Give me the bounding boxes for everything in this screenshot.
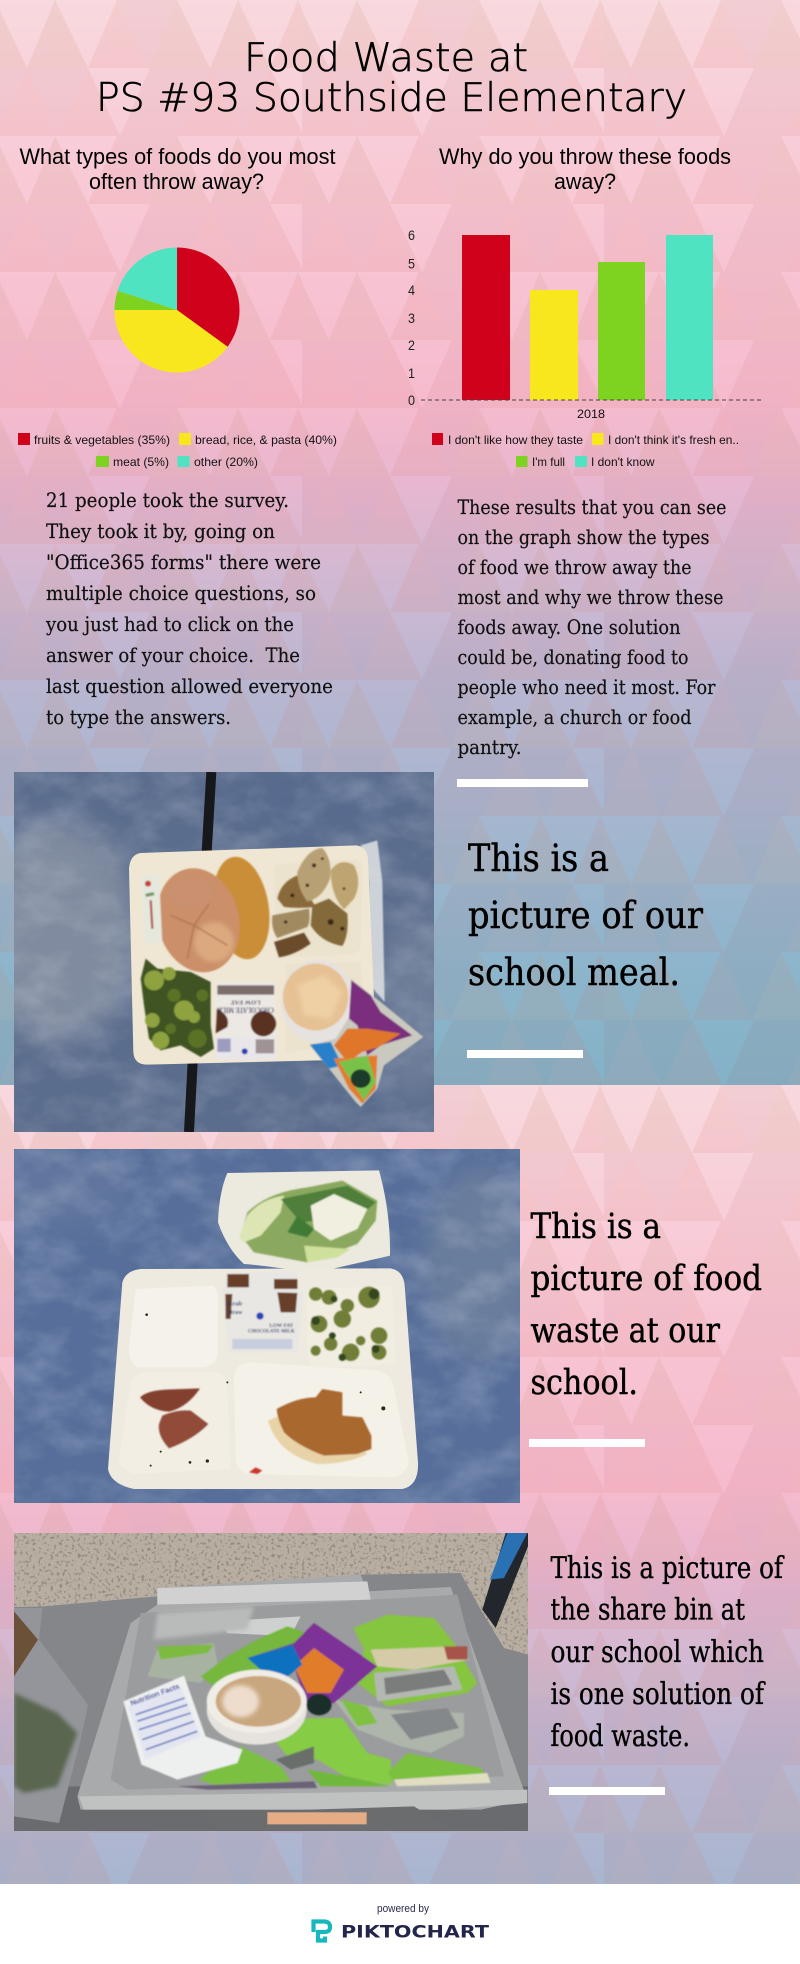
caption: share bin [550,1551,785,1754]
footer: powered by Piktochart [0,1884,800,1964]
bin label [267,1812,367,1824]
bar: not fresh [530,290,578,400]
title: Food Waste at [244,36,528,81]
potato wedges [272,848,358,957]
pie chart [114,247,240,373]
plastic utensil wrap [361,840,385,1002]
bar chart legend: I don't think it's fresh en.. [608,433,739,447]
paper food boat [218,1170,390,1273]
text block: results and solution [458,495,726,759]
text block: survey method: "Office365 forms" there were [46,550,321,574]
pie chart legend [18,433,337,469]
logo wordmark: PIKTOCHART [341,1922,489,1942]
black pipe in the photo [189,772,211,1132]
y axis labels: 4 [408,282,415,298]
caption: food waste: picture of food [530,1259,762,1299]
background: triangle pattern with gradient, lower block [0,1085,800,1884]
pie chart legend: meat (5%) [113,455,169,469]
caption: school meal [468,837,703,994]
y axis labels: 0 [408,392,415,408]
heading: pie chart question [20,144,336,194]
text block: survey method: last question allowed everyone [46,674,333,698]
broccoli [141,959,214,1057]
text block: results and solution: of food we throw away the [458,555,692,579]
milk carton [216,982,276,1059]
bar chart legend [432,433,739,469]
milk carton: Grab [227,1301,243,1308]
x axis label: 2018 [577,407,605,421]
pie chart legend: other (20%) [194,455,258,469]
green produce bags [147,1615,491,1790]
milk carton with nutrition label: Nutrition Facts [130,1683,181,1708]
background: triangle pattern with gradient, upper block [0,0,800,1085]
crumbs [145,1313,385,1467]
text block: results and solution: most and why we throw these [458,585,724,609]
granite counter [14,1533,528,1655]
text block: results and solution: example, a church or food [458,705,692,729]
divider bar 1 [457,779,588,787]
milk carton: LOW FAT [231,998,261,1004]
peach cup [281,960,355,1043]
sauce cup [207,1670,307,1745]
divider bar 3 [529,1439,645,1447]
title [96,36,687,121]
y axis labels: 3 [408,310,415,326]
milk carton: CHOCOLATE MILK [217,1006,274,1015]
milk carton: Straw [227,1310,243,1316]
text block: results and solution: These results that you can see [458,495,726,519]
leftover broccoli [309,1287,387,1361]
salad [239,1181,377,1262]
text block: results and solution: could be, donating food to [458,645,688,669]
potato pieces [140,1388,208,1448]
bar chart [408,227,763,421]
text block: survey method: to type the answers. [46,705,231,729]
cup label [444,1646,467,1660]
half-eaten bun [249,1389,371,1474]
bar: don't like taste [462,235,510,400]
heading: bar chart question: away? [554,169,616,194]
text block: survey method: you just had to click on the [45,612,294,636]
heading: pie chart question: What types of foods do you most [20,144,336,169]
y axis labels: 1 [408,365,415,381]
tray [129,845,376,1065]
caption: share bin: food waste. [550,1719,690,1754]
photo: school meal tray [14,772,434,1132]
caption: food waste: waste at our [530,1311,720,1351]
bar: don't know [666,235,713,400]
text block: survey method: multiple choice questions, so [46,581,316,605]
bar chart legend: I don't know [591,455,655,469]
text block: survey method: 21 people took the survey. [46,488,289,512]
text block: results and solution: people who need it most. For [458,675,716,699]
milk carton with nutrition label [123,1676,242,1780]
milk carton: CHOCOLATE MILK [248,1328,295,1334]
heading: bar chart question [439,144,731,194]
condiment packet [141,875,162,944]
text block: survey method [45,488,333,729]
caption: food waste: This is a [530,1207,661,1247]
y axis labels [408,227,415,408]
caption: school meal: school meal. [468,951,680,994]
left bin [14,1608,88,1823]
photo: food waste tray [14,1149,520,1503]
heading: pie chart question: often throw away? [89,169,264,194]
bun [159,867,240,974]
text block: survey method: They took it by, going on [46,519,275,543]
text block: results and solution: foods away. One solution [458,615,681,639]
divider bar 4 [549,1787,665,1795]
caption: school meal: This is a [468,837,609,880]
y axis labels: 2 [408,337,415,353]
text block: survey method: answer of your choice. The [46,643,300,667]
text block: results and solution: pantry. [458,735,522,759]
photo: share bin [14,1533,528,1831]
milk carton: LOW FAT [269,1324,294,1329]
carrot bag [247,1623,377,1715]
title: PS #93 Southside Elementary [96,76,687,121]
caption: share bin: the share bin at [550,1592,745,1628]
powered by label: powered by [377,1903,429,1915]
clear bin [77,1575,527,1831]
text block: results and solution: on the graph show the types [458,525,710,549]
caption: food waste: school. [530,1363,638,1403]
bar chart legend: I'm full [532,455,565,469]
blue post [482,1533,528,1628]
icon: Piktochart logo [314,1922,330,1940]
divider bar 2 [467,1050,583,1058]
y axis labels: 5 [408,256,415,272]
carrot bag [310,979,423,1107]
milk carton [222,1271,303,1353]
caption: food waste [530,1207,762,1403]
y axis labels: 6 [408,227,415,243]
bar: full [598,262,645,400]
pie chart legend: fruits & vegetables (35%) [34,433,170,447]
tray [108,1268,418,1489]
caption: school meal: picture of our [468,894,703,937]
chicken patty [215,856,271,960]
bar chart legend: I don't like how they taste [448,433,583,447]
heading: bar chart question: Why do you throw these foods [439,144,731,169]
pie chart legend: bread, rice, & pasta (40%) [195,433,337,447]
